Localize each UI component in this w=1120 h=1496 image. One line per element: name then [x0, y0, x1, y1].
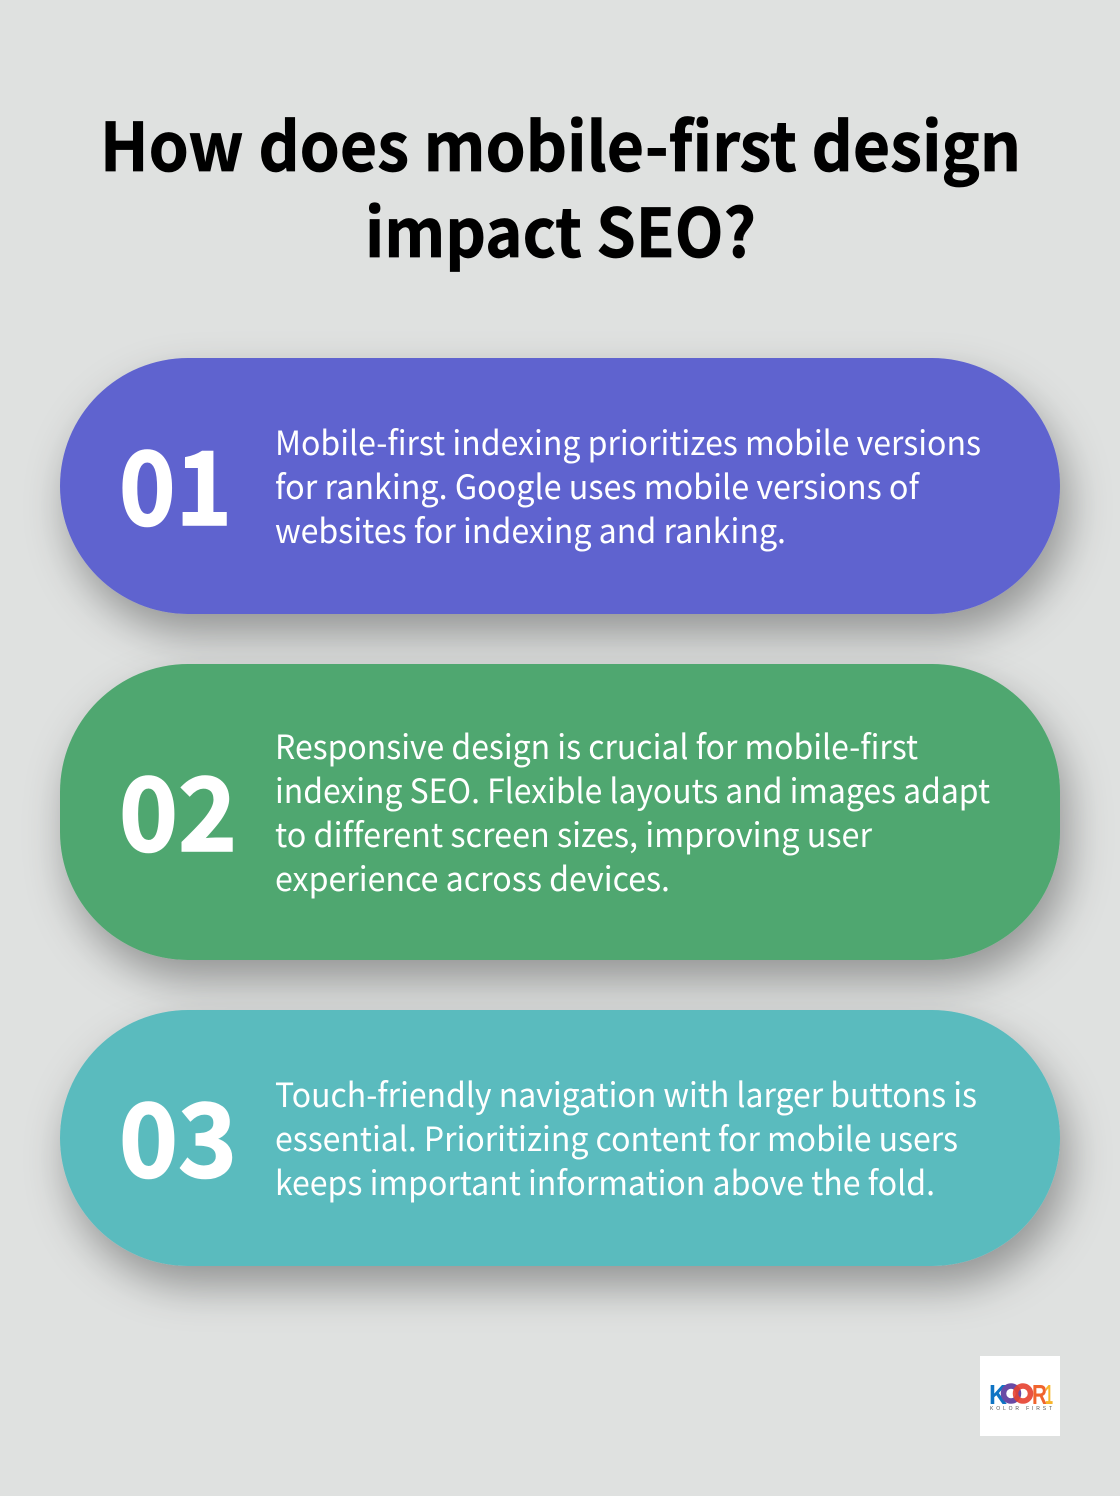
text block 01 — [275, 416, 981, 553]
title: How does mobile-first design — [100, 94, 1021, 191]
text block 01: Mobile-first indexing prioritizes mobile versions — [275, 416, 981, 465]
text block 03 — [275, 1068, 977, 1205]
text block 01: for ranking. Google uses mobile versions of — [275, 460, 920, 509]
text block 03: Touch-friendly navigation with larger buttons is — [275, 1068, 977, 1117]
logo wordmark — [989, 1379, 1053, 1410]
number 02: 02 — [119, 734, 237, 881]
panel: step 03 — [60, 1010, 1060, 1266]
text block 02 — [275, 720, 990, 901]
pill background 02 — [60, 664, 1060, 960]
logo background — [980, 1356, 1060, 1436]
logo: Koor1 Kolor First — [980, 1356, 1060, 1436]
title — [100, 94, 1021, 277]
text block 03: essential. Prioritizing content for mobile users — [275, 1112, 958, 1161]
text block 03: keeps important information above the fold. — [275, 1156, 935, 1205]
text block 01: websites for indexing and ranking. — [275, 504, 786, 553]
text block 02: to different screen sizes, improving user — [275, 808, 873, 857]
pill background 03 — [60, 1010, 1060, 1266]
text block 02: indexing SEO. Flexible layouts and images adapt — [275, 764, 990, 813]
number 01: 01 — [119, 408, 232, 555]
logo tagline: KOLOR FIRST — [990, 1406, 1052, 1412]
number 03: 03 — [119, 1060, 237, 1207]
logo wordmark: 1 — [1045, 1379, 1053, 1410]
panel: step 01 — [60, 358, 1060, 614]
logo wordmark: K — [989, 1379, 1007, 1410]
text block 02: experience across devices. — [275, 852, 670, 901]
panel: step 02 — [60, 664, 1060, 960]
title: impact SEO? — [365, 180, 756, 277]
logo wordmark: R — [1032, 1379, 1047, 1410]
text block 02: Responsive design is crucial for mobile-first — [275, 720, 918, 769]
pill background 01 — [60, 358, 1060, 614]
